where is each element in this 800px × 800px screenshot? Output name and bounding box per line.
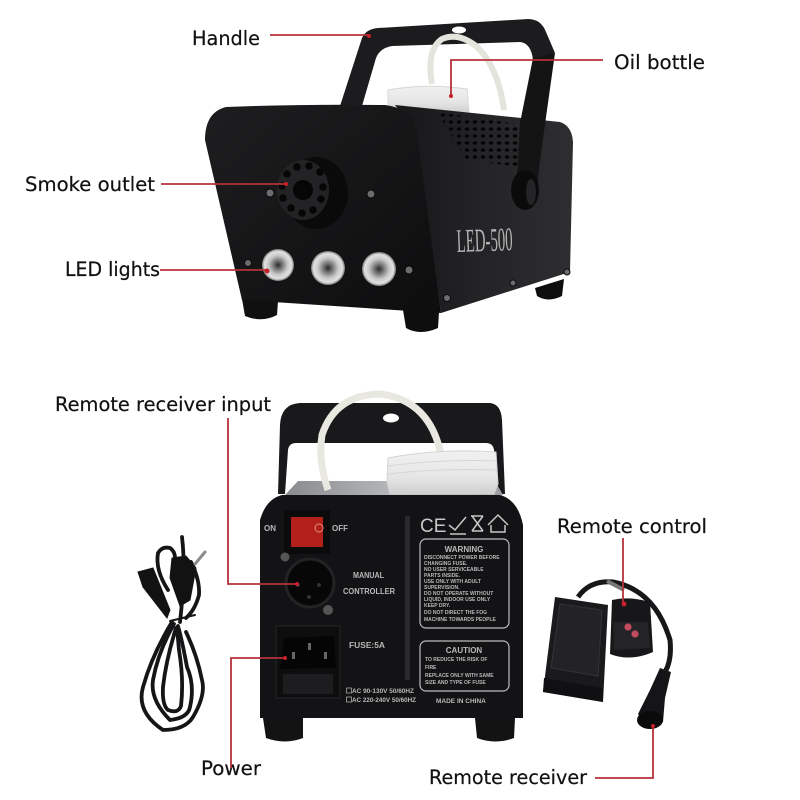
warning box: DISCONNECT POWER BEFORE	[424, 555, 500, 561]
callout: oil bottle	[449, 51, 705, 98]
callout: oil bottle: Oil bottle	[614, 51, 705, 74]
voltage options: AC 90-130V 50/60HZ	[352, 688, 414, 695]
on/off rocker switch	[264, 510, 348, 554]
machine side panel	[395, 105, 573, 313]
right rear foot	[475, 718, 515, 742]
plug pins	[195, 552, 205, 564]
IEC connector	[138, 568, 170, 618]
ventilation holes	[437, 112, 523, 167]
warning box: DO NOT DIRECT THE FOG	[424, 610, 487, 616]
rear panel	[260, 495, 523, 718]
warning box: LIQUID, INDOOR USE ONLY	[424, 597, 491, 603]
LED light left	[262, 249, 294, 281]
carrying handle, rear view	[278, 403, 505, 494]
voltage options: AC 220-240V 50/60HZ	[352, 697, 416, 704]
caution box: CAUTION	[446, 646, 482, 655]
hanging hole in rear handle	[383, 414, 399, 422]
handle right arm and side knob	[511, 53, 555, 210]
manual controller label: CONTROLLER	[343, 587, 395, 596]
left foot	[242, 299, 278, 319]
callout: smoke outlet: Smoke outlet	[25, 173, 155, 196]
callout: smoke outlet	[25, 173, 288, 196]
rear view of fog machine	[260, 394, 523, 742]
caution box: FIRE	[425, 665, 437, 671]
callout: remote receiver input: Remote receiver input	[55, 393, 271, 416]
warning box: DO NOT OPERATE WITHOUT	[424, 591, 493, 597]
warning box: CHANGING FUSE.	[424, 561, 468, 567]
key fob remote	[610, 598, 653, 658]
certification marks	[420, 515, 508, 537]
power cord	[138, 537, 205, 730]
oil bottle and tube, front view	[388, 37, 504, 112]
warning box: USE ONLY WITH ADULT	[424, 579, 481, 585]
callout: remote control	[557, 515, 707, 606]
carrying handle, front view	[340, 19, 555, 106]
callout: power	[201, 656, 287, 780]
warning box: NO USER SERVICEABLE	[424, 567, 484, 573]
front view of fog machine: LED-500	[456, 222, 513, 260]
front view of fog machine	[205, 19, 573, 332]
certification marks: CE	[420, 516, 446, 537]
callout: LED lights: LED lights	[65, 258, 160, 281]
warning box	[420, 539, 509, 628]
vertical groove	[405, 516, 410, 680]
caution box: REPLACE ONLY WITH SAME	[425, 673, 494, 679]
caution box: TO REDUCE THE RISK OF	[425, 657, 487, 663]
voltage options	[346, 688, 416, 704]
XLR connector	[637, 668, 671, 729]
oil bottle, rear view	[387, 451, 498, 494]
callout: remote control: Remote control	[557, 515, 707, 538]
LED light right	[362, 252, 396, 286]
smoke outlet nozzle	[277, 157, 348, 229]
warning box: SUPERVISION.	[424, 585, 460, 591]
callout: remote receiver: Remote receiver	[429, 766, 588, 789]
callout: remote receiver input	[55, 393, 299, 586]
callout: handle: Handle	[192, 27, 260, 50]
receiver box	[543, 597, 608, 702]
top plate	[285, 481, 503, 495]
callout: LED lights	[65, 258, 270, 281]
wireless remote set	[543, 581, 671, 729]
warning box: WARNING	[445, 545, 483, 554]
on/off rocker switch: ON	[264, 524, 276, 533]
LED light centre	[311, 251, 345, 285]
made in china label: MADE IN CHINA	[436, 698, 486, 705]
warning box: MACHINE TOWARDS PEOPLE	[424, 617, 497, 623]
rear foot	[535, 279, 564, 300]
machine front panel	[205, 105, 441, 313]
centre foot	[403, 310, 439, 332]
mains plug body	[170, 556, 196, 606]
tube, rear view	[321, 394, 441, 490]
panel screws	[244, 189, 570, 302]
manual controller label: MANUAL	[353, 571, 384, 580]
callout: handle	[192, 27, 371, 50]
on/off rocker switch: OFF	[332, 524, 348, 533]
antenna plug	[607, 581, 624, 590]
fuse label: FUSE:5A	[349, 641, 385, 650]
power inlet	[276, 626, 340, 698]
callout: remote receiver	[429, 724, 655, 789]
caution box: SIZE AND TYPE OF FUSE	[425, 680, 486, 686]
warning box: PARTS INSIDE.	[424, 573, 461, 579]
hanging hole in handle	[452, 26, 466, 34]
callout: power: Power	[201, 757, 262, 780]
caution box	[420, 641, 509, 691]
warning box: KEEP DRY.	[424, 603, 451, 609]
remote cable	[578, 582, 670, 672]
left rear foot	[263, 718, 303, 742]
manual controller label	[343, 571, 395, 596]
XLR receiver socket	[280, 552, 334, 615]
